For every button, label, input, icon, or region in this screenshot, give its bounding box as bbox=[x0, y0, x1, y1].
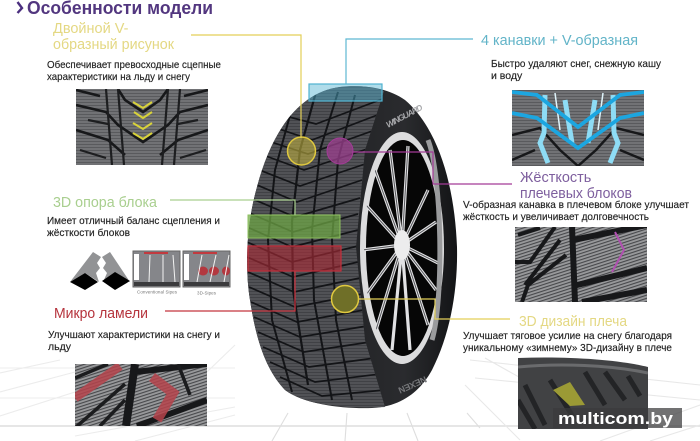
hub bbox=[394, 230, 410, 260]
marker: shoulder circle bbox=[332, 286, 358, 312]
panel: double V pattern bbox=[47, 21, 221, 165]
connector: yellow shoulder bbox=[359, 299, 510, 319]
3D block illustration bbox=[70, 252, 130, 290]
rim outer lip bbox=[428, 140, 440, 340]
description: Улучшает тяговое усилие на снегу благодаря bbox=[463, 330, 672, 342]
description: льду bbox=[48, 341, 72, 353]
shoulder image bbox=[518, 356, 648, 429]
rim well bbox=[366, 140, 440, 356]
groove image bbox=[512, 90, 644, 166]
marker: purple circle bbox=[327, 138, 353, 164]
description: Имеет отличный баланс сцепления и bbox=[47, 215, 220, 227]
panel: shoulder block stiffness bbox=[463, 170, 689, 302]
heading: Микро ламели bbox=[54, 306, 148, 322]
spokes bbox=[362, 146, 442, 350]
title bbox=[18, 0, 213, 18]
rim ring bbox=[360, 132, 444, 364]
connector: yellow top bbox=[191, 35, 301, 138]
heading: образный рисунок bbox=[53, 37, 175, 53]
tread image bbox=[76, 89, 208, 165]
panel: 4 grooves bbox=[481, 33, 662, 166]
marker: green band bbox=[248, 215, 340, 238]
heading: плечевых блоков bbox=[520, 186, 632, 202]
tread bbox=[247, 86, 385, 408]
3D sipes caption: 3D-Sipes bbox=[197, 290, 217, 296]
marker: tread overlay blue bbox=[309, 84, 382, 101]
tire bbox=[240, 80, 457, 415]
description: жёсткость и увеличивает долговечность bbox=[463, 211, 650, 223]
watermark text: multicom.by bbox=[558, 409, 674, 428]
sidewall brand text: WINGUARD bbox=[384, 102, 424, 130]
tire body bbox=[247, 86, 457, 408]
marker: red band bbox=[248, 246, 341, 271]
conventional sipes caption: Conventional Sipes bbox=[137, 290, 178, 294]
description: Улучшают характеристики на снегу и bbox=[48, 329, 220, 341]
heading: 4 канавки + V-образная bbox=[481, 33, 638, 49]
connector: purple bbox=[352, 152, 512, 184]
connector: red bbox=[165, 271, 295, 311]
connector: blue bbox=[346, 39, 473, 84]
icon: title chevron bbox=[18, 2, 22, 13]
description: Быстро удаляют снег, снежную кашу bbox=[491, 58, 662, 70]
watermark background bbox=[553, 408, 682, 428]
heading: Двойной V- bbox=[53, 21, 129, 37]
connector: green bbox=[170, 200, 295, 215]
wheel rim bbox=[360, 132, 444, 364]
marker: yellow circle bbox=[288, 137, 316, 165]
3D sipes image bbox=[183, 251, 230, 287]
conventional sipes image bbox=[133, 251, 180, 287]
panel: 3D block support bbox=[47, 195, 230, 296]
description: уникальному «зимнему» 3D-дизайну в плече bbox=[463, 342, 672, 354]
tread image bbox=[75, 364, 207, 428]
floor grid bbox=[0, 345, 700, 441]
panel: 3D shoulder design bbox=[463, 314, 672, 429]
description: и воду bbox=[491, 70, 523, 82]
description: характеристики на льду и снегу bbox=[47, 71, 191, 83]
heading: Жёсткость bbox=[520, 170, 591, 186]
description: Обеспечивает превосходные сцепные bbox=[47, 59, 221, 71]
tread image bbox=[515, 225, 647, 302]
watermark bbox=[553, 408, 682, 428]
heading: 3D опора блока bbox=[53, 195, 158, 211]
description: жёсткости блоков bbox=[47, 227, 130, 239]
heading: 3D дизайн плеча bbox=[519, 314, 628, 330]
sidewall maker text: NEXEN bbox=[397, 374, 428, 396]
panel: micro sipes bbox=[48, 306, 220, 428]
description: V-образная канавка в плечевом блоке улучшает bbox=[463, 199, 689, 211]
